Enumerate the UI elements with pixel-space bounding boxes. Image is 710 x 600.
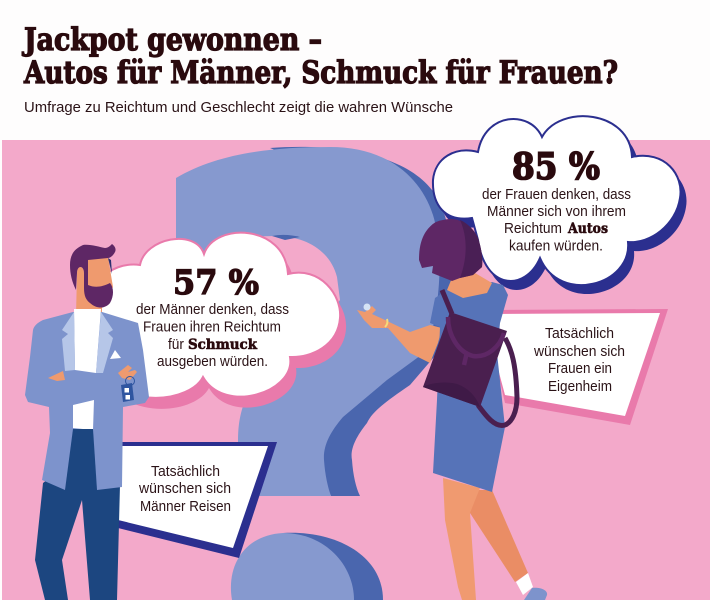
bubble text: kaufen würden. [509,238,603,254]
shoe [524,588,547,600]
question mark dot [231,533,383,600]
backpack [423,290,517,425]
bubble text: der Männer denken, dass [136,302,289,318]
trousers [35,470,120,600]
title: Jackpot gewonnen – [21,22,322,58]
bubble text: Autos [567,221,608,237]
callout: women reality: Frauen ein [548,361,612,377]
stat: 57 percent: 57 % [173,263,259,303]
hair and beard [70,244,116,308]
bubble text: Frauen ihren Reichtum [143,320,281,336]
hands [48,365,137,381]
callout: women reality: Eigenheim [548,379,612,395]
t-shirt [74,309,101,373]
bracelet [385,319,387,327]
bubble text: der Frauen denken, dass [482,187,631,203]
bubble: 57 percent men [100,233,346,409]
bubble: 85 percent women [433,116,687,294]
callout: men reality: wünschen sich [138,481,231,497]
bubble text: Schmuck [188,337,257,353]
sock [516,573,533,595]
bubble text [482,187,631,254]
bubble text: ausgeben würden. [157,354,268,370]
panel: pink background [2,140,710,600]
subtitle: Umfrage zu Reichtum und Geschlecht zeigt die wahren Wünsche [24,99,453,116]
neck [447,273,492,298]
lower shirt [73,400,94,430]
figure: woman [357,219,547,600]
figure: man [25,244,149,600]
jacket [25,312,149,490]
trousers waist [65,429,97,490]
title [21,22,618,91]
callout: women reality [495,309,668,425]
stat: 85 percent: 85 % [512,146,600,188]
ring [364,304,370,310]
question mark [176,147,455,600]
bubble text [136,302,289,370]
callout: men reality [118,442,277,558]
dress [430,282,508,492]
bubble text: für [168,337,184,353]
hair [419,219,482,281]
key fob [121,376,134,402]
lapels [62,312,113,373]
bubble text: Männer sich von ihrem [487,204,626,220]
callout: men reality: Tatsächlich [151,464,220,480]
callout: women reality: wünschen sich [533,344,625,360]
neck and face [76,257,113,316]
bubble text: Reichtum [504,221,562,237]
callout: men reality: Männer Reisen [140,499,231,515]
callout: women reality: Tatsächlich [545,326,614,342]
legs [443,478,528,600]
arm and hand [357,306,442,363]
title: Autos für Männer, Schmuck für Frauen? [23,55,618,91]
pocket square [110,350,121,359]
